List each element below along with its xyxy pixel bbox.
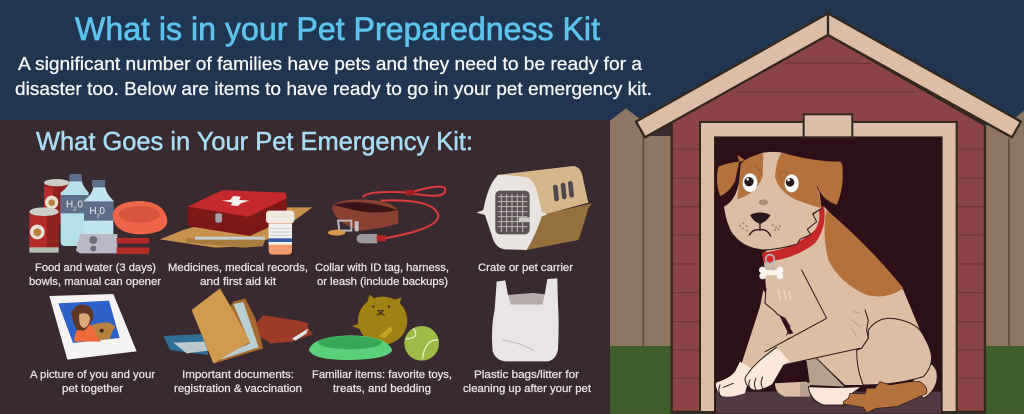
icon: plush toy, frisbee and tennis ball: [309, 295, 439, 361]
icon: first aid kit, folders and pill bottle: [160, 190, 312, 255]
caption: or leash (include backups): [317, 276, 448, 288]
icon: cans, bottles, bowl and can opener: 0: [77, 199, 83, 210]
door frame: [700, 122, 957, 412]
near front leg: [765, 310, 868, 365]
item: crate: [477, 166, 592, 274]
item: medicines: [160, 190, 312, 288]
caption: [312, 369, 452, 395]
near paw: [745, 347, 790, 390]
far front leg: [742, 290, 790, 368]
caption: pet together: [62, 383, 124, 395]
icon: cans, bottles, bowl and can opener: 2: [73, 207, 76, 213]
intro text: [15, 53, 652, 99]
dog: [715, 152, 937, 413]
caption: registration & vaccination: [174, 383, 302, 395]
illustration: doghouse scene: [610, 13, 1024, 414]
hind leg: [857, 318, 932, 385]
icon: cans, bottles, bowl and can opener: H: [89, 206, 97, 217]
hind foot: [808, 387, 862, 405]
bone tag: [759, 267, 783, 279]
fence and grass: [610, 108, 1024, 414]
icon: cans, bottles, bowl and can opener: 2: [97, 213, 100, 219]
icon: pet carrier: [477, 166, 592, 251]
nose and mouth: [759, 199, 768, 205]
intro text: disaster too. Below are items to have ready to go in your pet emergency kit.: [15, 78, 652, 99]
icon: cans, bottles, bowl and can opener: 0: [99, 206, 105, 217]
tail: [910, 364, 937, 398]
icon: folders and papers: [163, 288, 313, 364]
fur marks: [778, 290, 791, 301]
caption: Medicines, medical records,: [168, 262, 308, 274]
neck fur line: [733, 208, 822, 250]
collar: [762, 206, 825, 263]
far paw: [716, 362, 752, 397]
caption: [30, 369, 155, 395]
icon: collar, ID tag and red leash: [328, 187, 445, 243]
heading: kit list: What Goes in Your Pet Emergency Kit:: [36, 126, 473, 156]
eyes: [743, 173, 757, 192]
doghouse: [636, 13, 1021, 413]
item: plastic bags: [463, 278, 591, 395]
panel: kit list background: [0, 120, 612, 414]
head: [717, 152, 843, 279]
caption: Plastic bags/litter for: [474, 369, 580, 381]
intro text: A significant number of families have pets and they need to be ready for a: [18, 53, 643, 74]
caption: [174, 369, 302, 395]
item: picture: [30, 294, 155, 395]
tail tuft: [843, 382, 927, 413]
left ear: [717, 155, 745, 196]
freckles: [739, 222, 781, 232]
back patch: [825, 210, 903, 296]
caption: Collar with ID tag, harness,: [315, 262, 449, 274]
caption: [29, 262, 162, 288]
main body: [763, 207, 932, 385]
caption: bowls, manual can opener: [29, 276, 162, 288]
icon: photo of owner and pet: [49, 294, 137, 360]
icon: plastic bag: [492, 278, 559, 361]
caption: [315, 262, 449, 288]
item: documents: [163, 288, 313, 395]
caption: Familiar items: favorite toys,: [312, 369, 452, 381]
tag ring: [767, 260, 773, 269]
roof: [636, 13, 1021, 137]
caption: Crate or pet carrier: [478, 262, 573, 274]
caption: Important documents:: [182, 369, 294, 381]
lower body: [715, 207, 937, 413]
caption: cleaning up after your pet: [463, 383, 591, 395]
icon: cans, bottles, bowl and can opener: H: [66, 199, 73, 210]
item: food and water: [29, 174, 167, 288]
icon: cans, bottles, bowl and can opener: [29, 174, 167, 254]
item: collar and leash: [315, 187, 449, 288]
caption: Food and water (3 days): [35, 262, 156, 274]
far hind foot: [775, 382, 810, 397]
item: toys: [309, 295, 452, 395]
caption: treats, and bedding: [333, 383, 431, 395]
caption: A picture of you and your: [30, 369, 155, 381]
caption: [463, 369, 591, 395]
face patches and right ear: [737, 153, 763, 199]
head shape: [724, 152, 822, 250]
caption: and first aid kit: [200, 276, 276, 288]
panel: header background: [0, 0, 1024, 120]
title: What is in your Pet Preparedness Kit: [75, 11, 600, 47]
caption: [168, 262, 308, 288]
